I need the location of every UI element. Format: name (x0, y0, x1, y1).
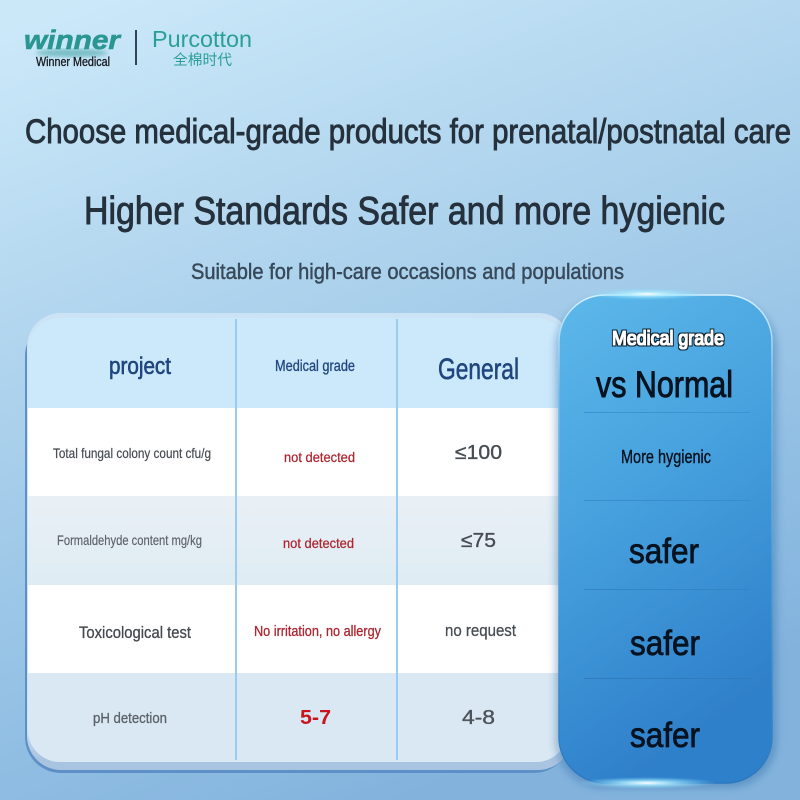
cell: More hygienic: More hygienic (621, 447, 711, 467)
column header: Medical grade: Medical grade (275, 358, 355, 375)
row: toxicological test (79, 621, 516, 642)
row: formaldehyde content (57, 530, 496, 552)
row: toxicological test: Toxicological test (79, 623, 191, 642)
cell: safer 1: safer (629, 532, 699, 571)
column header: project: project (109, 353, 171, 380)
row: total fungal colony count: not detected (284, 449, 355, 465)
label: vs Normal: vs Normal (596, 364, 733, 405)
row: total fungal colony count (53, 442, 502, 465)
row: pH detection: 5-7 (300, 707, 331, 729)
row: total fungal colony count: ≤100 (455, 442, 502, 464)
row: pH detection: 4-8 (462, 707, 495, 729)
logo group (24, 25, 252, 69)
cell: safer 3: safer (630, 716, 700, 755)
glow: top (587, 288, 707, 300)
cell: safer 2: safer (630, 624, 700, 663)
logo: winner: winner (24, 25, 122, 55)
logo caption: Winner Medical: Winner Medical (36, 54, 110, 69)
row: pH detection (93, 707, 495, 729)
row: formaldehyde content: Formaldehyde content mg/kg (57, 532, 202, 548)
subheading: Suitable for high-care occasions and populations (191, 259, 624, 284)
row: formaldehyde content: ≤75 (461, 530, 496, 552)
panel: comparison table (25, 313, 572, 773)
heading: Higher Standards Safer and more hygienic (84, 190, 725, 233)
glow: bottom (577, 777, 717, 789)
row: toxicological test: No irritation, no allergy (254, 623, 381, 640)
row: pH detection: pH detection (93, 710, 167, 727)
logo: Chinese name: 全棉时代 (173, 51, 233, 69)
row: total fungal colony count: Total fungal colony count cfu/g (53, 445, 211, 461)
panel: medical grade vs normal (555, 288, 777, 789)
row: toxicological test: no request (445, 621, 516, 640)
column header: General: General (438, 353, 519, 386)
row: formaldehyde content: not detected (283, 535, 354, 551)
table header row (28, 318, 568, 408)
logo: Purcotton: Purcotton (152, 26, 252, 52)
label: Medical grade: Medical grade (612, 328, 724, 350)
